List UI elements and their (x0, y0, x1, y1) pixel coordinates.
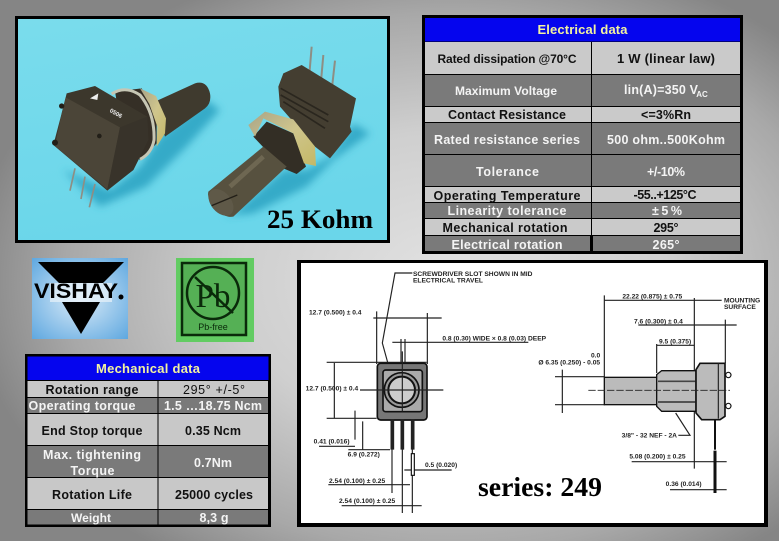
row: contact resistance: Contact Resistance (448, 108, 566, 122)
logo: Vishay: VISHAY (34, 280, 118, 303)
row: electrical rotation (425, 236, 740, 252)
drawing: front view: 0.8 (0.30) WIDE × 0.8 (0.03) DEEP (442, 335, 547, 342)
photo: two potentiometers: 0506 (108, 108, 123, 120)
row: max tightening torque: 0.7Nm (194, 456, 232, 470)
row: maximum voltage (425, 75, 740, 106)
row: electrical rotation: Electrical rotation (452, 238, 562, 252)
row: rotation range (28, 381, 268, 397)
row: operating temperature (425, 187, 740, 203)
photo: two potentiometers (52, 47, 370, 221)
panel: product photo (15, 16, 390, 243)
drawing: front view: SCREWDRIVER SLOT SHOWN IN MID (413, 271, 533, 278)
row: rated dissipation: Rated dissipation @70°C (438, 52, 577, 66)
drawing: side view: 5.08 (0.200) ± 0.25 (629, 454, 686, 461)
drawing: side view: 7.6 (0.300) ± 0.4 (634, 319, 683, 326)
row: rated resistance series: Rated resistance series (434, 133, 580, 147)
panel: dimension drawing (297, 260, 768, 527)
header: electrical data (425, 18, 740, 42)
row: max tightening torque: Max. tightening (43, 448, 141, 462)
drawing: side view (538, 294, 760, 493)
row: maximum voltage: lin(A)=350 V (624, 83, 699, 97)
row: tolerance: Tolerance (476, 165, 539, 179)
drawing: side view: 9.5 (0.375) (659, 339, 691, 346)
row: mechanical rotation: Mechanical rotation (442, 221, 568, 235)
drawing: side view: Ø 6.35 (0.250) - 0.05 (538, 359, 600, 366)
row: operating temperature: Operating Temperature (434, 189, 581, 203)
row: rated dissipation (425, 42, 740, 74)
row: max tightening torque: Torque (70, 464, 115, 478)
row: weight: 8,3 g (200, 511, 228, 525)
icon: Pb-free badge: Pb (196, 278, 230, 315)
row: maximum voltage: AC (696, 90, 708, 99)
row: end stop torque (28, 414, 268, 445)
row: rated resistance series (425, 123, 740, 154)
row: mechanical rotation (425, 219, 740, 235)
row: operating torque: Operating torque (28, 399, 136, 413)
row: max tightening torque (28, 446, 268, 478)
row: operating torque (28, 398, 268, 413)
row: rotation life: 25000 cycles (175, 488, 253, 502)
row: mechanical rotation: 295° (654, 221, 678, 235)
icon: Pb-free badge: Pb-free (198, 322, 228, 332)
row: operating torque: 1.5 …18.75 Ncm (164, 399, 262, 413)
panel: mechanical data table (25, 354, 271, 527)
photo caption: 25 Kohm (267, 205, 373, 234)
drawing: side view: 22.22 (0.875) ± 0.75 (622, 294, 683, 301)
panel: electrical data table (422, 15, 743, 254)
row: rotation range: 295° +/-5° (183, 383, 245, 397)
row: rated dissipation: 1 W (linear law) (617, 51, 715, 66)
row: tolerance (425, 155, 740, 186)
drawing: front view: 0.5 (0.020) (425, 462, 457, 469)
logo: Vishay (32, 258, 128, 339)
drawing: side view: SURFACE (724, 304, 756, 311)
row: contact resistance: <=3%Rn (641, 108, 691, 122)
drawing: front view: 12.7 (0.500) ± 0.4 (309, 310, 362, 317)
drawing: front view: 2.54 (0.100) ± 0.25 (339, 498, 395, 505)
row: linearity tolerance: Linearity tolerance (448, 204, 567, 218)
drawing: side view: MOUNTING (724, 298, 760, 305)
drawing: side view: 0.36 (0.014) (666, 481, 702, 488)
row: tolerance: +/-10% (647, 165, 685, 179)
row: rated resistance series: 500 ohm..500Kohm (607, 133, 725, 147)
drawing caption: series: series: 249 (478, 472, 602, 502)
row: contact resistance (425, 107, 740, 122)
row: weight: Weight (71, 511, 111, 525)
drawing: side view: 3/8" - 32 NEF - 2A (622, 432, 677, 439)
row: weight (28, 510, 268, 525)
row: end stop torque: End Stop torque (42, 424, 143, 438)
drawing: front view: 6.9 (0.272) (348, 452, 380, 459)
header: mechanical data: Mechanical data (96, 361, 201, 376)
row: end stop torque: 0.35 Ncm (185, 424, 241, 438)
drawing: front view: 2.54 (0.100) ± 0.25 (329, 478, 385, 485)
row: rotation range: Rotation range (46, 383, 139, 397)
row: electrical rotation: 265° (652, 238, 680, 252)
drawing: front view: ELECTRICAL TRAVEL (413, 277, 483, 284)
row: linearity tolerance (425, 203, 740, 218)
drawing: front view: 0.41 (0.016) (314, 439, 350, 446)
header: mechanical data (28, 356, 268, 380)
header: electrical data: Electrical data (538, 22, 628, 37)
row: rotation life: Rotation Life (52, 488, 132, 502)
row: operating temperature: -55..+125°C (634, 188, 696, 202)
drawing: side view: 0.0 (591, 353, 601, 360)
drawing: front view: 12.7 (0.500) ± 0.4 (306, 386, 358, 393)
icon: Pb-free badge (176, 258, 254, 342)
row: linearity tolerance: ±5% (652, 204, 682, 218)
row: rotation life (28, 478, 268, 509)
drawing: front view (306, 271, 547, 513)
row: maximum voltage: Maximum Voltage (455, 84, 557, 98)
